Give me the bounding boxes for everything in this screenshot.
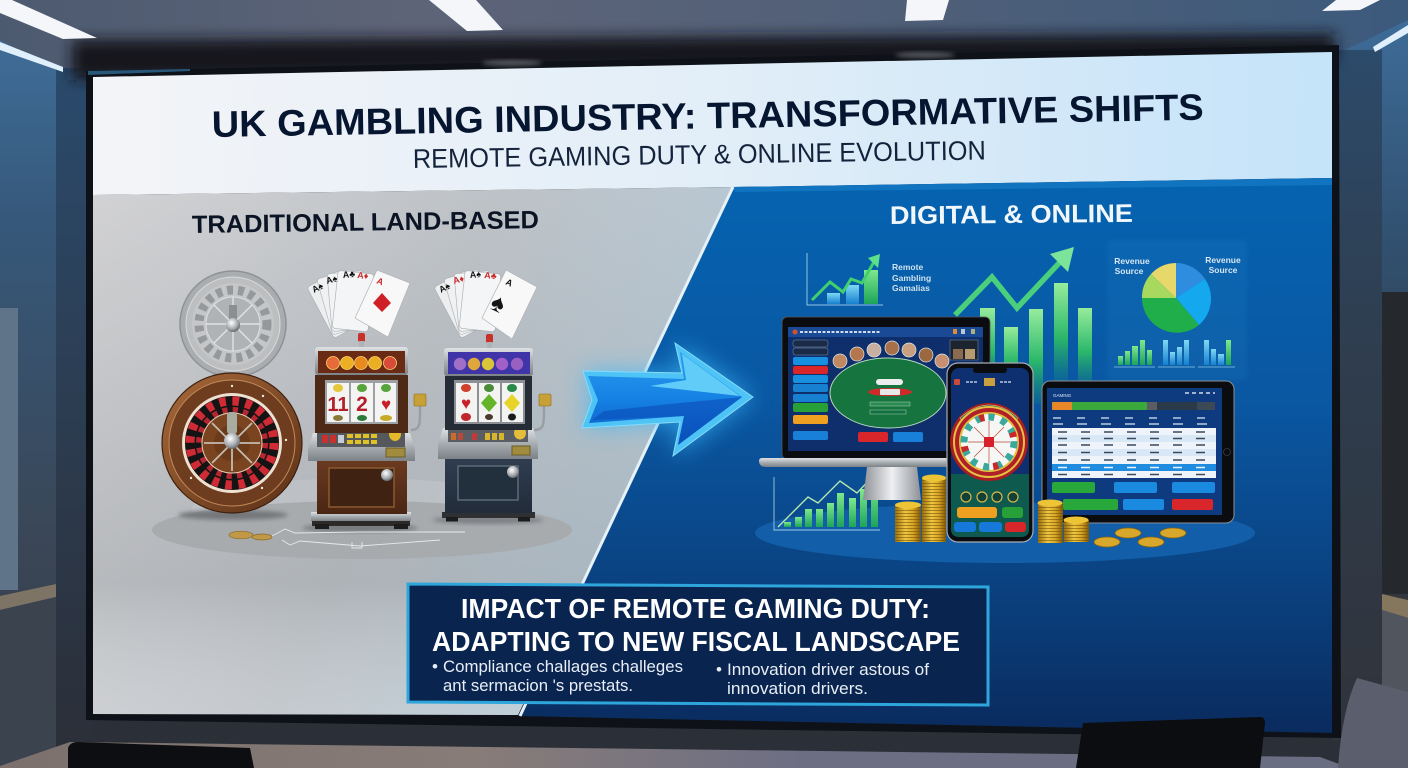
icon: fan of playing cards with black suit: A♠ bbox=[469, 269, 482, 280]
icon: fan of playing cards with red suit: A bbox=[375, 276, 385, 287]
text: revenue source labels: Source bbox=[1115, 266, 1144, 276]
phone prize wheel bbox=[950, 403, 1028, 481]
text: revenue source labels: Source bbox=[1209, 265, 1238, 275]
icon: navy slot machine bbox=[438, 334, 551, 522]
chart: revenue source pie bbox=[1142, 263, 1211, 333]
heading: digital and online: DIGITAL & ONLINE bbox=[890, 200, 1133, 230]
callout bullet: compliance: • bbox=[432, 657, 438, 676]
icon: laptop with poker table bbox=[759, 317, 990, 500]
icon: brown slot machine: 2 bbox=[356, 393, 368, 416]
icon: brown slot machine: 11 bbox=[327, 394, 349, 416]
laptop side menu buttons bbox=[793, 340, 828, 440]
callout heading bbox=[432, 593, 960, 657]
icon: fan of playing cards with black suit bbox=[434, 269, 537, 339]
icon: fan of playing cards with red suit: A♦ bbox=[357, 270, 369, 281]
icon: fan of playing cards with black suit: A♠ bbox=[437, 281, 452, 295]
text: remote gambling label bbox=[892, 262, 931, 293]
icon: tablet with data table: GAMING bbox=[1053, 393, 1072, 398]
text: remote gambling label: Gamalias bbox=[892, 283, 930, 293]
left wall panels bbox=[0, 308, 56, 768]
tablet progress bar bbox=[1052, 402, 1215, 410]
tablet table bbox=[1052, 428, 1216, 478]
right wall panels bbox=[1382, 292, 1408, 768]
phone tokens and buttons bbox=[954, 492, 1026, 532]
callout bullet: compliance: ant sermacion 's prestats. bbox=[443, 676, 633, 695]
subtitle: REMOTE GAMING DUTY & ONLINE EVOLUTION bbox=[413, 136, 986, 174]
heading: traditional land-based: TRADITIONAL LAND-BASED bbox=[192, 206, 539, 239]
panel: small growth chart bbox=[807, 253, 883, 305]
icon: loose coins bbox=[1094, 528, 1186, 547]
chart: lower left growth chart bbox=[774, 472, 880, 530]
diagonal white divider bbox=[520, 187, 733, 716]
laptop player avatars bbox=[833, 341, 949, 368]
icon: tablet with data table bbox=[1042, 381, 1234, 523]
icon: fan of playing cards with black suit: A♦ bbox=[452, 273, 466, 286]
text: remote gambling label: Remote bbox=[892, 262, 923, 272]
floor platform left bbox=[152, 478, 572, 559]
icon: brown slot machine bbox=[308, 333, 426, 529]
text: revenue source labels: Revenue bbox=[1205, 255, 1241, 265]
callout bullet: innovation bbox=[716, 660, 929, 698]
laptop poker table bbox=[830, 358, 946, 428]
chart: mini bar groups bbox=[1114, 340, 1235, 367]
chair: centre bbox=[1076, 717, 1265, 768]
icon: navy slot machine: ♥ bbox=[461, 394, 471, 413]
icon: fan of playing cards with red suit: A♣ bbox=[342, 269, 356, 280]
callout: impact of remote gaming duty bbox=[408, 584, 988, 705]
icon: coins and chalk lines on floor bbox=[229, 529, 465, 548]
panel: traditional land-based background bbox=[93, 187, 733, 715]
icon: fan of playing cards with red suit bbox=[307, 269, 410, 338]
ceiling light strips bbox=[0, 0, 1408, 72]
icon: silver roulette wheel bbox=[180, 271, 286, 377]
header band bbox=[93, 52, 1332, 195]
chair: left bbox=[68, 742, 254, 768]
icon: fan of playing cards with black suit: A bbox=[504, 277, 515, 289]
icon: fan of playing cards with black suit: ♠ bbox=[486, 288, 510, 319]
chart: large green growth bars bbox=[955, 247, 1092, 404]
callout heading: ADAPTING TO NEW FISCAL LANDSCAPE bbox=[432, 626, 960, 657]
callout bullet: compliance: Compliance challages challeges bbox=[443, 657, 683, 676]
panel: digital and online background bbox=[518, 178, 1332, 733]
icon: coin stacks right bbox=[1038, 500, 1089, 543]
platform: digital devices base bbox=[755, 503, 1255, 563]
faint data panel behind pie chart bbox=[1107, 240, 1247, 380]
icon: brown roulette wheel bbox=[162, 373, 302, 513]
icon: fan of playing cards with red suit: A♠ bbox=[310, 281, 325, 295]
title: UK GAMBLING INDUSTRY: TRANSFORMATIVE SHIFTS bbox=[211, 87, 1204, 145]
text: revenue source labels: Revenue bbox=[1114, 256, 1150, 266]
tablet buttons bbox=[1052, 482, 1215, 510]
chair: right bbox=[1338, 678, 1408, 768]
callout bullet: innovation: innovation drivers. bbox=[727, 679, 868, 698]
arrow: traditional to digital bbox=[582, 343, 753, 456]
text: remote gambling label: Gambling bbox=[892, 273, 931, 283]
screen bbox=[93, 52, 1332, 733]
icon: fan of playing cards with red suit: A♠ bbox=[325, 273, 339, 286]
callout bullet: innovation: Innovation driver astous of bbox=[727, 660, 929, 679]
icon: brown slot machine: ♥ bbox=[381, 395, 391, 414]
conference table bbox=[0, 742, 1350, 768]
text: revenue source labels bbox=[1114, 255, 1241, 276]
callout heading: IMPACT OF REMOTE GAMING DUTY: bbox=[461, 593, 930, 624]
icon: coin stacks left bbox=[895, 474, 946, 542]
callout bullet: compliance bbox=[432, 657, 683, 695]
callout bullet: innovation: • bbox=[716, 660, 722, 679]
icon: fan of playing cards with black suit: A♣ bbox=[484, 270, 497, 281]
icon: phone with prize wheel bbox=[947, 363, 1033, 542]
